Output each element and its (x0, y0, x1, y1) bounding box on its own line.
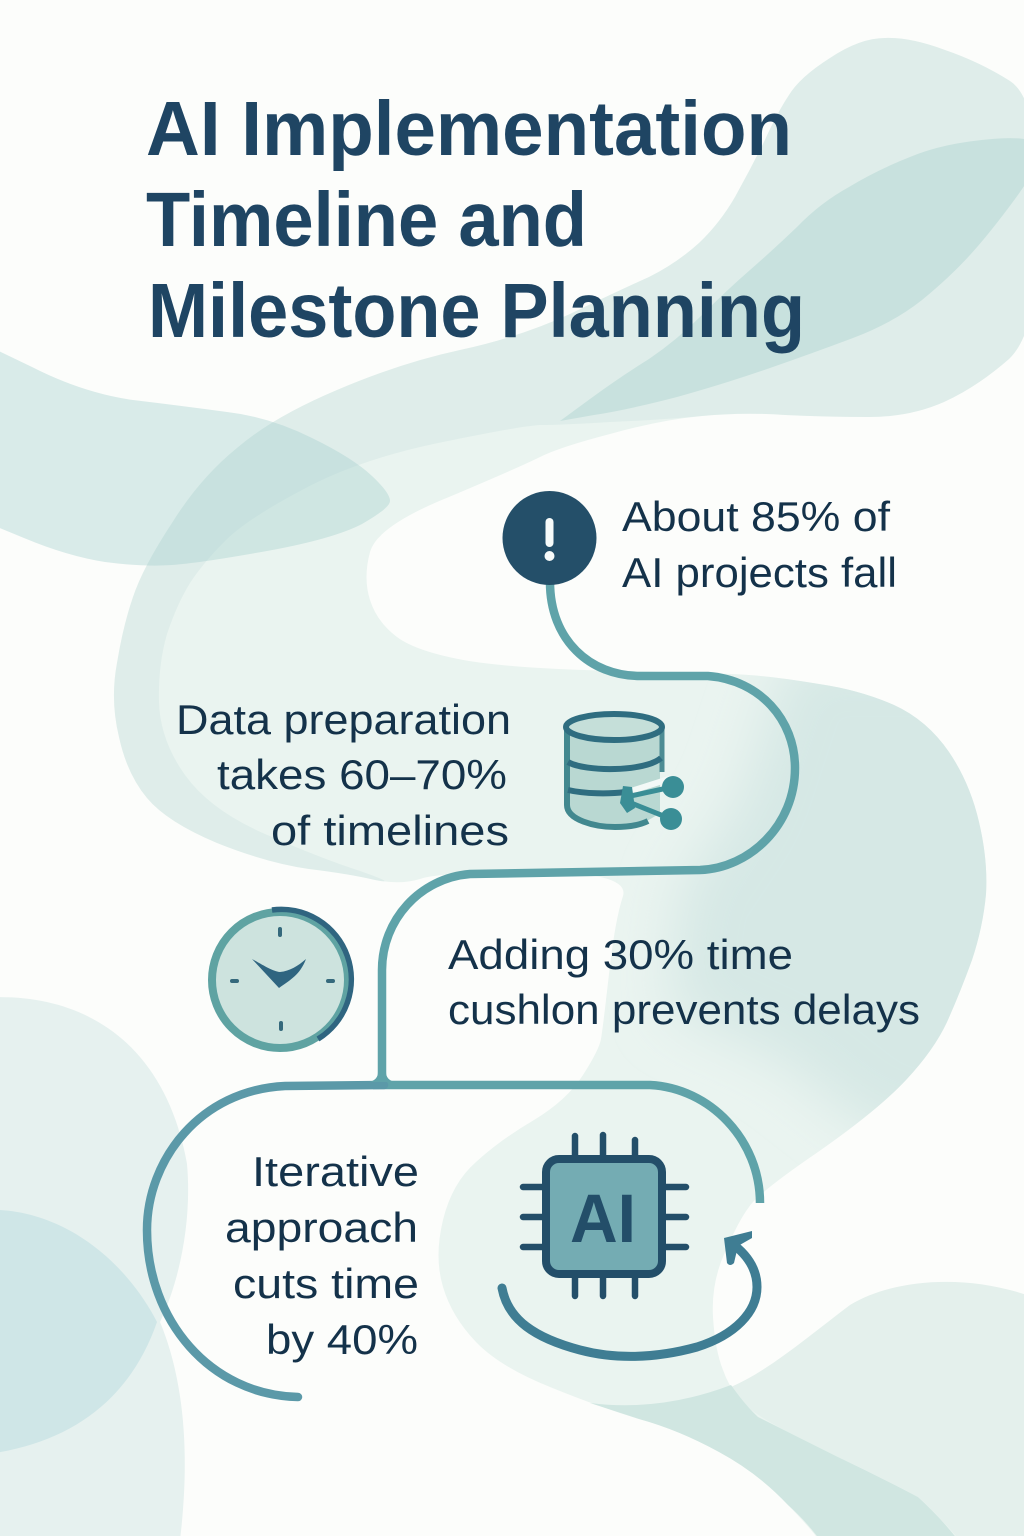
icon: database (566, 714, 684, 830)
text: iterative: by 40% (266, 1316, 418, 1363)
text: 85%: AI projects fall (622, 549, 897, 596)
timeline path (147, 582, 795, 1397)
title: Milestone Planning (148, 268, 805, 354)
text: time cushion (448, 931, 920, 1033)
icon: alert (502, 491, 596, 585)
text: 85% (622, 493, 897, 596)
text: time cushion: cushlon prevents delays (448, 986, 920, 1033)
text: iterative: Iterative (252, 1148, 419, 1195)
text: data preparation: of timelines (271, 807, 509, 854)
text: iterative: cuts time (233, 1260, 419, 1307)
text: data preparation: Data preparation (176, 696, 511, 743)
title (146, 86, 805, 354)
text: data preparation: takes 60–70% (217, 751, 507, 798)
text: data preparation (176, 696, 511, 854)
arrow: iteration loop (502, 1231, 757, 1356)
text: 85%: About 85% of (622, 493, 890, 540)
title: AI Implementation (146, 86, 792, 172)
title: Timeline and (146, 177, 587, 263)
icon: clock (212, 909, 351, 1048)
icon: AI chip (523, 1135, 686, 1296)
icon: AI chip: AI (570, 1180, 636, 1257)
text: iterative (225, 1148, 419, 1363)
text: time cushion: Adding 30% time (448, 931, 793, 978)
text: iterative: approach (225, 1204, 418, 1251)
